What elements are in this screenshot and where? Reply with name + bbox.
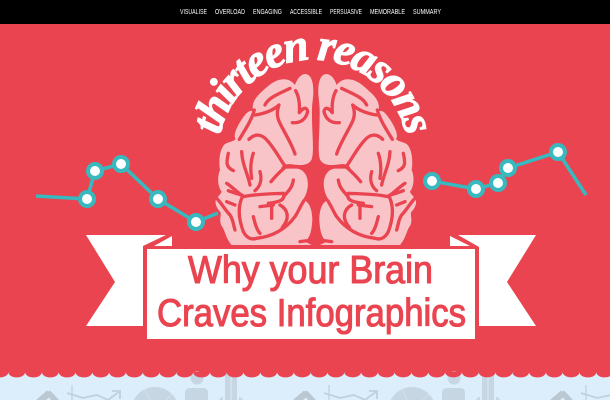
brain illustration xyxy=(216,74,416,245)
scalloped edge xyxy=(0,372,610,377)
banner title: Why your Brain xyxy=(188,249,433,292)
right line chart xyxy=(425,145,586,196)
banner title: Craves Infographics xyxy=(157,292,466,335)
navigation bar: MEMORABLE xyxy=(370,7,405,16)
left line chart xyxy=(36,157,218,229)
banner title xyxy=(157,249,466,335)
navigation bar: PERSUASIVE xyxy=(330,7,362,16)
navigation bar: SUMMARY xyxy=(413,7,441,16)
arched heading: thirteen reasons xyxy=(194,38,426,134)
navigation bar: ENGAGING xyxy=(253,7,282,16)
navigation bar: VISUALISE xyxy=(180,7,207,16)
ribbon banner xyxy=(86,235,536,339)
navigation bar xyxy=(0,0,610,24)
bottom pattern strip xyxy=(0,372,610,400)
navigation bar: ACCESSIBLE xyxy=(290,7,322,16)
navigation bar: OVERLOAD xyxy=(215,7,245,16)
